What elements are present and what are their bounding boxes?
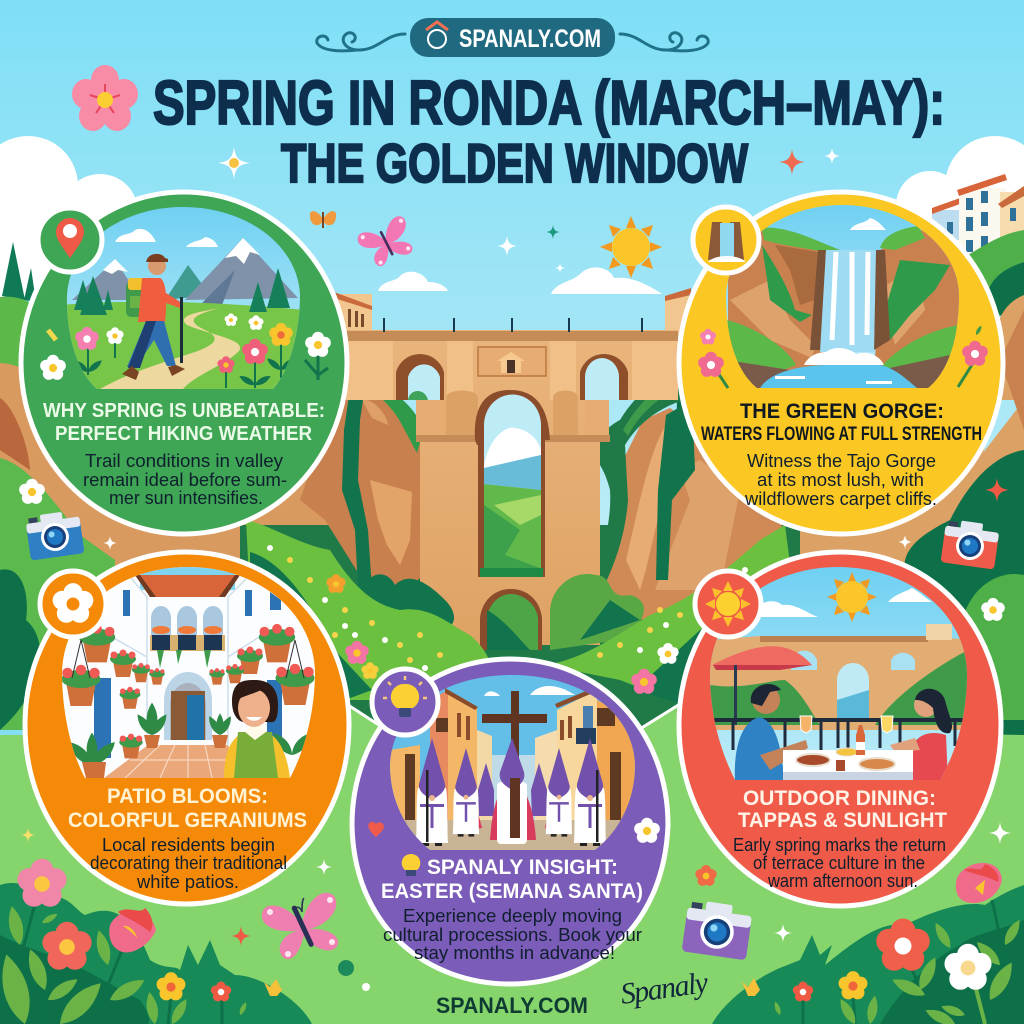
heading [738, 787, 947, 832]
heading: TAPPAS & SUNLIGHT [738, 809, 947, 832]
decorative heart and flower [368, 818, 660, 843]
background clouds right [895, 136, 1024, 255]
panel: patio blooms [25, 552, 349, 904]
sparkles lower [19, 478, 1011, 991]
heading: PERFECT HIKING WEATHER [55, 423, 313, 445]
flowers on ring [40, 330, 331, 380]
icon: red camera [940, 518, 1000, 570]
body text: stay months in advance! [414, 943, 615, 963]
gorge rock right [590, 362, 785, 640]
heading: PATIO BLOOMS: [107, 785, 268, 808]
illustration: terrace dining [708, 565, 970, 785]
panel: outdoor dining [679, 552, 1001, 906]
icon: pink title flower [72, 65, 138, 131]
background clouds left [0, 136, 138, 300]
title: THE GOLDEN WINDOW [281, 132, 748, 194]
body text: decorating their traditional [90, 853, 287, 873]
heading: COLORFUL GERANIUMS [68, 809, 307, 832]
body text: Witness the Tajo Gorge [747, 451, 936, 471]
heading: EASTER (SEMANA SANTA) [381, 880, 643, 903]
sparkles near title [218, 147, 840, 179]
heading [68, 785, 307, 832]
heading [701, 400, 982, 445]
illustration: waterfall [726, 205, 959, 388]
heading: WHY SPRING IS UNBEATABLE: [43, 400, 325, 422]
flower meadow right [545, 525, 800, 704]
sparkles in sky [497, 225, 565, 273]
background terrain right [674, 230, 1024, 735]
illustration: white patio [55, 565, 320, 783]
icon: purple camera [682, 899, 753, 960]
heading: OUTDOOR DINING: [743, 787, 936, 810]
body text [83, 451, 287, 508]
heading [381, 856, 643, 903]
body text: cultural processions. Book your [383, 925, 642, 945]
body text [744, 451, 937, 509]
panel: why spring is unbeatable [21, 192, 347, 534]
sky clouds [378, 267, 662, 294]
flowers and foliage bottom right [712, 863, 1024, 1024]
sky background [0, 0, 1024, 600]
icon: lower pink butterfly [262, 893, 338, 959]
icon: bulb bullet [402, 854, 420, 876]
body text: Early spring marks the return [733, 835, 946, 855]
illustration: hiker on trail [60, 205, 305, 395]
gorge rock left [300, 357, 423, 600]
logo badge with flourishes [317, 18, 708, 57]
icon: orange butterfly [310, 211, 336, 228]
body text: at its most lush, with [757, 470, 924, 490]
icon: light bulb badge [372, 669, 438, 735]
illustration: semana santa procession [388, 673, 638, 854]
heading: SPANALY INSIGHT: [427, 856, 618, 879]
flowers on ring [698, 325, 988, 388]
icon: sun badge [695, 571, 761, 637]
icon: sun in scene [827, 572, 877, 622]
panel: the green gorge [679, 192, 1003, 534]
flower meadow left [246, 520, 492, 700]
hillside town [932, 174, 1024, 258]
body text [90, 835, 287, 892]
background trees and terrain left [0, 242, 345, 730]
icon: flower badge [40, 571, 106, 637]
body text: of terrace culture in the [753, 853, 925, 873]
body text: wildflowers carpet cliffs. [744, 489, 937, 509]
body text: mer sun intensifies. [109, 488, 263, 508]
Puente Nuevo bridge [334, 288, 691, 650]
signature: Spanaly [618, 966, 711, 1011]
body text [733, 835, 946, 891]
bottom meadow [0, 702, 1024, 1024]
gorge floor behind meadow [240, 525, 800, 740]
flowers and foliage bottom left [0, 859, 312, 1024]
body text: Local residents begin [102, 835, 275, 855]
title [153, 69, 945, 194]
body text: Experience deeply moving [403, 906, 622, 926]
icon: sun [600, 216, 662, 278]
body text: remain ideal before sum- [83, 470, 287, 490]
body text: white patios. [136, 872, 239, 892]
body text: Trail conditions in valley [85, 451, 283, 471]
icon: map pin badge [38, 208, 102, 272]
icon: pink butterfly [355, 215, 415, 270]
panel: spanaly insight easter [352, 659, 668, 984]
icon: waterfall badge [693, 207, 759, 273]
body text [383, 906, 642, 963]
logo badge with flourishes: SPANALY.COM [459, 25, 601, 53]
body text: warm afternoon sun. [767, 871, 918, 891]
heading: THE GREEN GORGE: [740, 400, 944, 423]
white edge along valley [345, 703, 680, 810]
footer url: SPANALY.COM [436, 993, 588, 1018]
icon: blue camera [25, 509, 85, 561]
bushes under bridge [363, 574, 644, 650]
heading [43, 400, 325, 445]
